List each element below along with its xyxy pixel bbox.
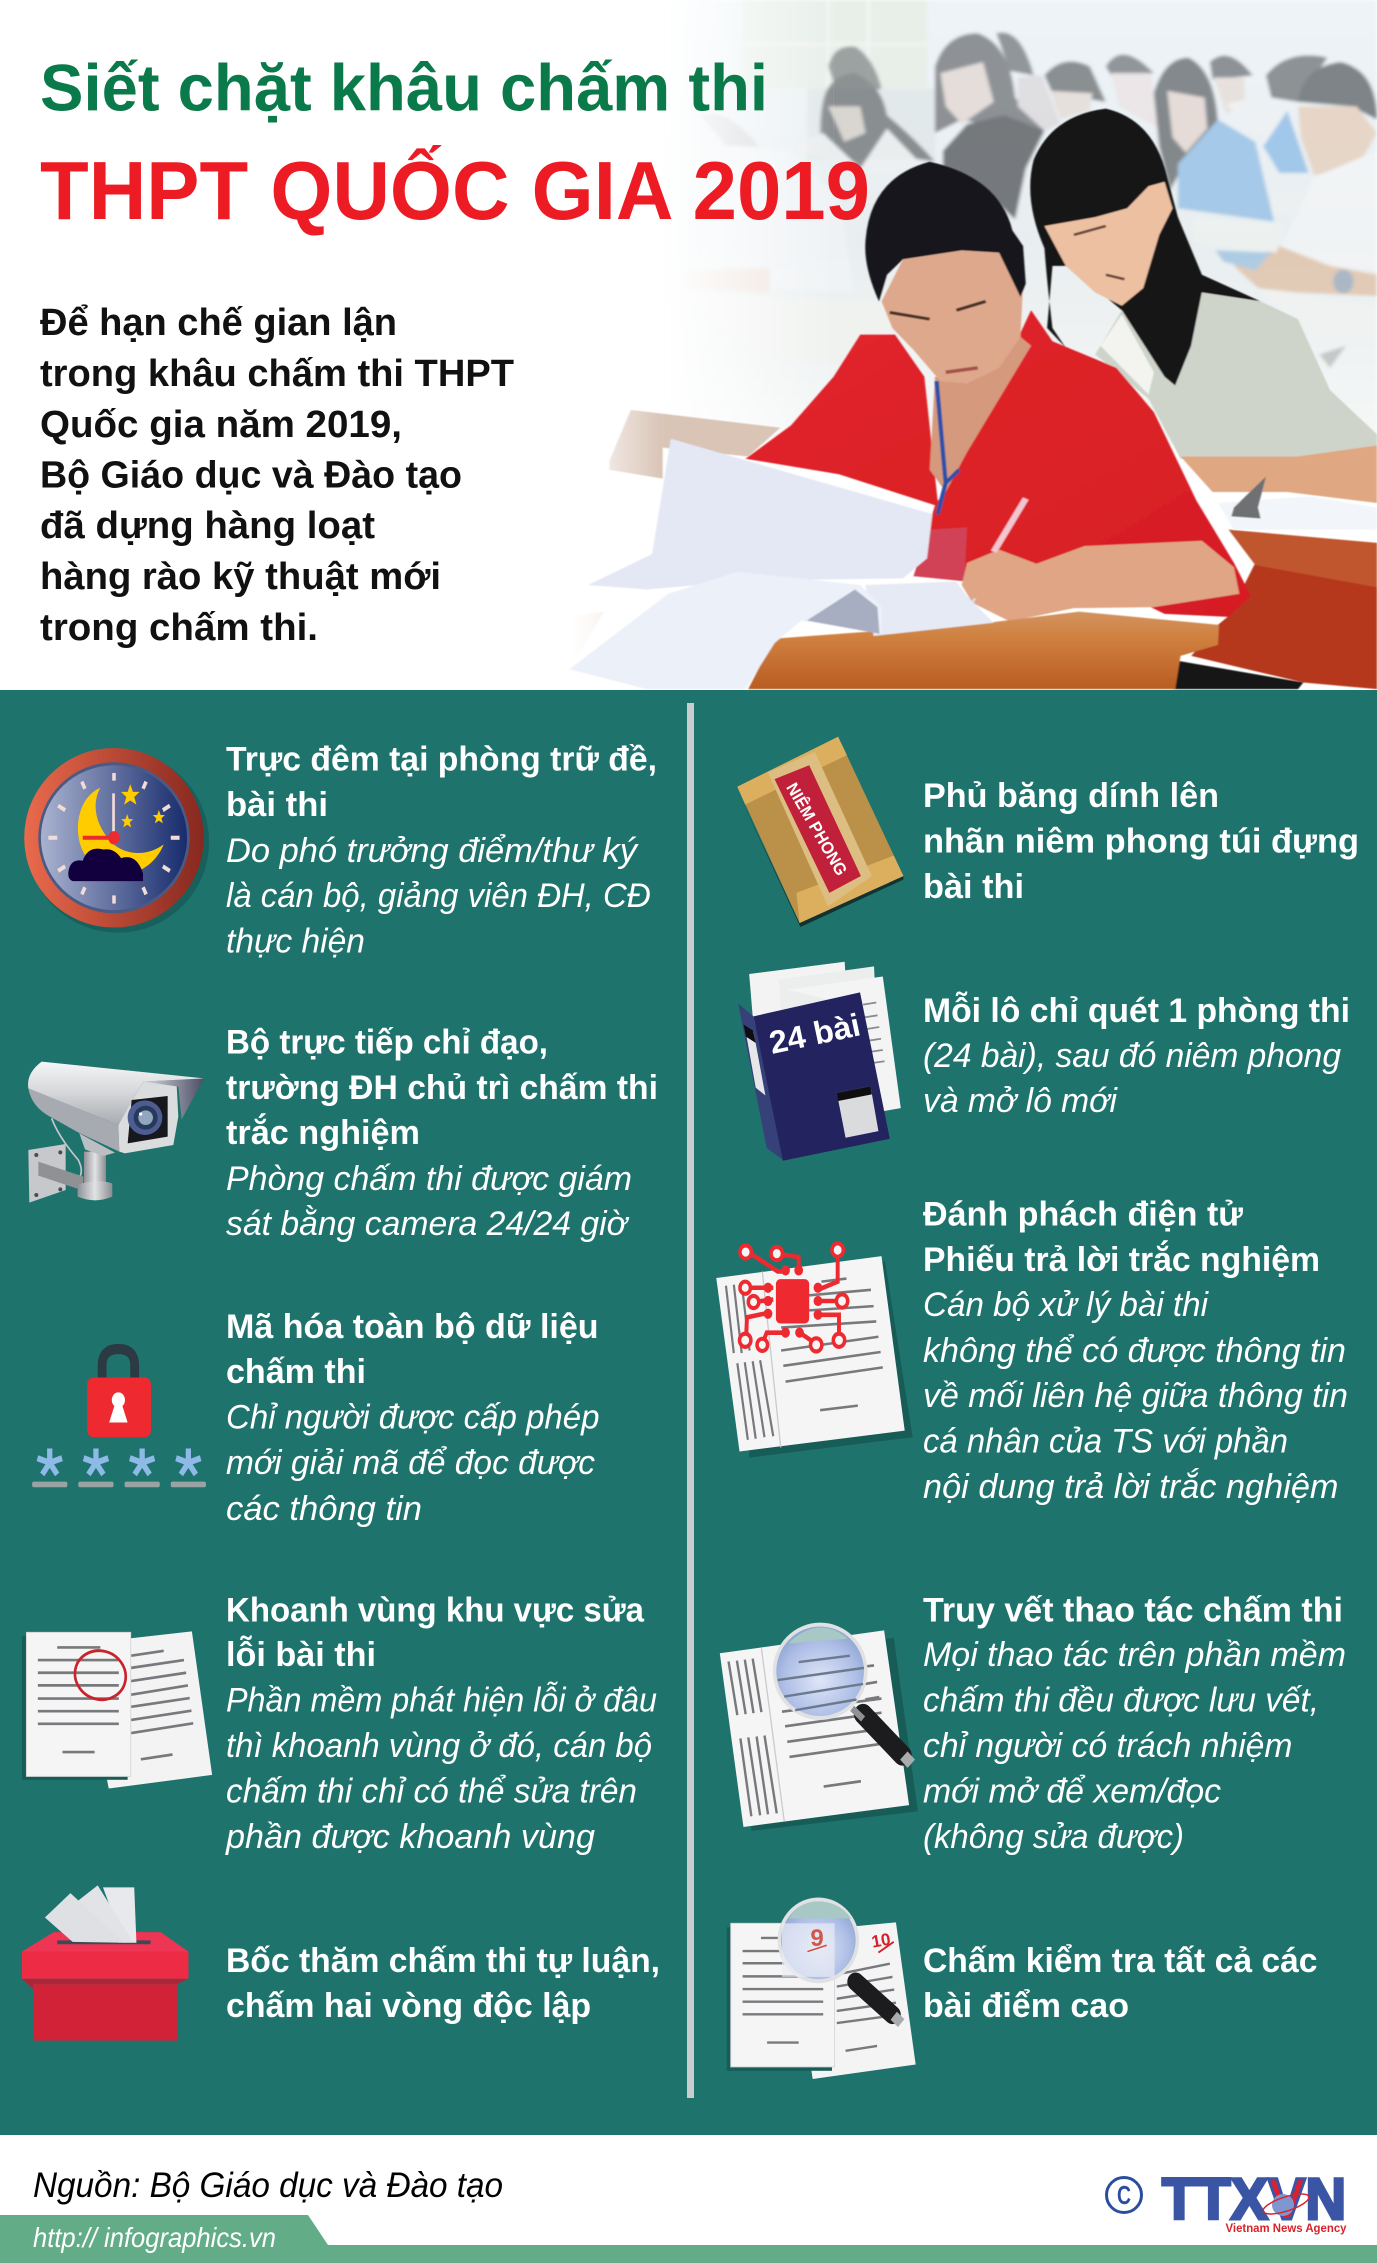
text: batch scanning (923, 992, 1350, 1120)
icon: sealed envelope (737, 737, 903, 927)
icon: folder of 24 papers (738, 962, 901, 1161)
logo: TTXVN: C (1117, 2180, 1131, 2210)
intro paragraph: trong khâu chấm thi THPT (40, 353, 514, 395)
item: sealing tape (737, 737, 1359, 927)
text: data encryption: Chỉ người được cấp phép (226, 1399, 600, 1437)
item: batch scanning (738, 962, 1350, 1161)
text: zoned correction (225, 1592, 657, 1856)
text: night duty: thực hiện (226, 922, 365, 960)
text: action tracing: mới mở để xem/đọc (923, 1773, 1221, 1811)
item: night duty (24, 740, 657, 960)
text: night duty (226, 740, 657, 960)
rear teacher (1030, 109, 1261, 386)
text: data encryption: chấm thi (226, 1353, 366, 1391)
label: score 10: 10 (870, 1930, 892, 1952)
text: direct supervision: trường ĐH chủ trì chấm thi (226, 1069, 658, 1107)
item: action tracing (720, 1592, 1346, 1856)
faded left desk (588, 410, 780, 636)
text: direct supervision: Bộ trực tiếp chỉ đạo, (226, 1024, 548, 1062)
text: action tracing: chấm thi đều được lưu vết, (923, 1682, 1319, 1720)
icon: security camera (28, 1062, 204, 1203)
intro paragraph: Quốc gia năm 2019, (40, 404, 402, 446)
text: electronic anonymisation: Đánh phách điện tử (923, 1196, 1243, 1234)
text: high score check (923, 1942, 1318, 2025)
text: night duty: Do phó trưởng điểm/thư ký (226, 832, 639, 870)
item: direct supervision (28, 1024, 658, 1243)
text: high score check: Chấm kiểm tra tất cả các (923, 1942, 1318, 1980)
logo: TTXVN: TTXVN (1162, 2167, 1346, 2232)
item: data encryption (32, 1308, 599, 1528)
text: night duty: là cán bộ, giảng viên ĐH, CĐ (226, 877, 650, 915)
icon: red ballot box (22, 1885, 188, 2041)
photo: two teachers grading exam papers (540, 0, 1377, 689)
item: electronic anonymisation (716, 1196, 1348, 1506)
text: zoned correction: lỗi bài thi (226, 1636, 376, 1674)
green url band (0, 2215, 1377, 2263)
source line: Nguồn: Bộ Giáo dục và Đào tạo (33, 2166, 503, 2205)
text: batch scanning: và mở lô mới (923, 1082, 1118, 1120)
text: night duty: Trực đêm tại phòng trữ đề, (226, 740, 657, 778)
faded students (684, 32, 1377, 296)
intro paragraph: Bộ Giáo dục và Đào tạo (40, 454, 462, 496)
title line 2: THPT QUỐC GIA 2019 (40, 144, 870, 237)
text: action tracing: Mọi thao tác trên phần mềm (923, 1636, 1346, 1674)
intro paragraph: hàng rào kỹ thuật mới (40, 556, 441, 598)
text: electronic anonymisation: nội dung trả lời trắc nghiệm (923, 1468, 1338, 1506)
title line 1: Siết chặt khâu chấm thi (40, 50, 768, 124)
text: sealing tape: Phủ băng dính lên (923, 777, 1219, 815)
text: zoned correction: phần được khoanh vùng (225, 1818, 595, 1856)
label: 24 bài: 24 bài (766, 1007, 863, 1061)
text: action tracing: (không sửa được) (923, 1818, 1184, 1856)
text: electronic anonymisation: về mối liên hệ giữa thông tin (923, 1377, 1348, 1415)
item: high score check (727, 1898, 1318, 2079)
item: ballot draw (22, 1885, 660, 2041)
intro paragraph: đã dựng hàng loạt (40, 505, 375, 547)
text: direct supervision: Phòng chấm thi được giám (226, 1160, 632, 1198)
label: score 9: 9 (810, 1925, 824, 1952)
open notebook (866, 581, 994, 636)
held exam paper (588, 439, 932, 589)
footer (0, 2166, 1377, 2263)
icon: papers with red circle (22, 1631, 212, 1789)
icon: answer sheet with circuit chip (716, 1243, 913, 1458)
desk under book (748, 612, 1219, 689)
text: high score check: bài điểm cao (923, 1987, 1129, 2025)
text: electronic anonymisation (923, 1196, 1348, 1506)
text: batch scanning: (24 bài), sau đó niêm phong (923, 1037, 1341, 1075)
text: action tracing (923, 1592, 1346, 1856)
icon: sheet with magnifying glass (720, 1623, 918, 1831)
label: seal text: NIÊM PHONG (782, 779, 851, 879)
text: data encryption: mới giải mã để đọc được (226, 1444, 595, 1482)
text: action tracing: Truy vết thao tác chấm thi (923, 1592, 1343, 1630)
icon: clock with moon (24, 748, 209, 933)
text: ballot draw (226, 1942, 660, 2025)
text: zoned correction: Phần mềm phát hiện lỗi ở đâu (226, 1682, 657, 1720)
intro paragraph (40, 302, 514, 649)
text: electronic anonymisation: cá nhân của TS với phần (923, 1422, 1288, 1460)
intro paragraph: Để hạn chế gian lận (40, 302, 397, 344)
text: sealing tape (923, 777, 1359, 906)
intro paragraph: trong chấm thi. (40, 607, 318, 649)
text: sealing tape: bài thi (923, 868, 1024, 906)
front teacher (746, 310, 1251, 617)
text: zoned correction: Khoanh vùng khu vực sửa (226, 1592, 645, 1630)
text: night duty: bài thi (226, 786, 328, 824)
text: zoned correction: chấm thi chỉ có thể sửa trên (226, 1773, 637, 1811)
logo: TTXVN: Vietnam News Agency (1226, 2223, 1347, 2235)
text: data encryption: Mã hóa toàn bộ dữ liệu (226, 1308, 599, 1346)
item: zoned correction (22, 1592, 657, 1856)
text: ballot draw: Bốc thăm chấm thi tự luận, (226, 1942, 660, 1980)
icon: padlock with password stars (32, 1349, 206, 1487)
text: direct supervision: sát bằng camera 24/24 giờ (226, 1205, 629, 1243)
right desk and paper (1191, 563, 1377, 689)
teal content panel (0, 690, 1377, 2135)
text: ballot draw: chấm hai vòng độc lập (226, 1987, 591, 2025)
text: batch scanning: Mỗi lô chỉ quét 1 phòng thi (923, 992, 1350, 1030)
text: data encryption: các thông tin (226, 1490, 422, 1528)
text: data encryption (226, 1308, 600, 1528)
icon: graded papers with magnifying glass (727, 1898, 916, 2079)
text: electronic anonymisation: Cán bộ xử lý bài thi (923, 1286, 1209, 1324)
url: http:// infographics.vn (33, 2222, 276, 2253)
text: zoned correction: thì khoanh vùng ở đó, cán bộ (226, 1727, 652, 1765)
text: direct supervision (226, 1024, 658, 1243)
text: action tracing: chỉ người có trách nhiệm (923, 1727, 1292, 1765)
text: electronic anonymisation: không thể có được thông tin (923, 1332, 1346, 1370)
text: sealing tape: nhãn niêm phong túi đựng (923, 822, 1359, 860)
title (40, 50, 870, 237)
text: electronic anonymisation: Phiếu trả lời trắc nghiệm (923, 1241, 1320, 1279)
text: direct supervision: trắc nghiệm (226, 1114, 420, 1152)
